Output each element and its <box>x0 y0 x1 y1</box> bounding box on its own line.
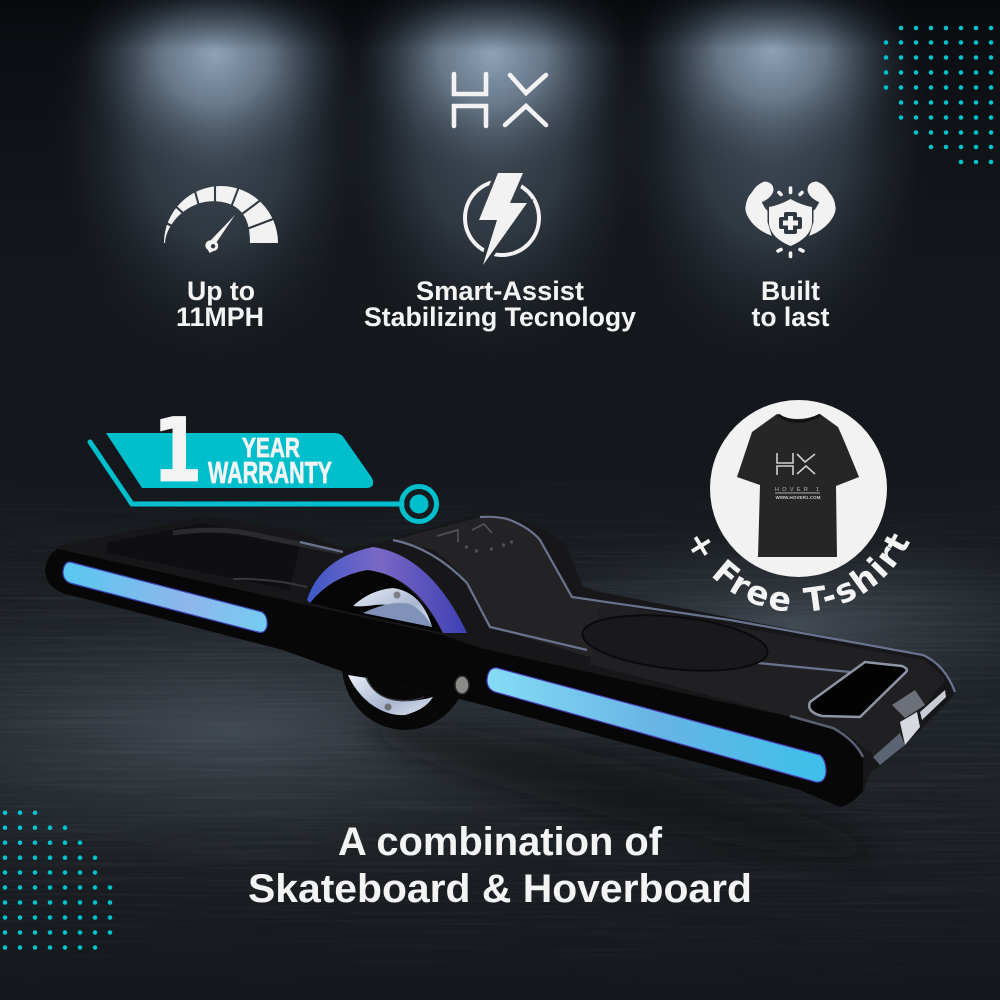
metal end cap <box>873 690 946 765</box>
right deck texture <box>590 603 945 760</box>
label: smart-assist stabilizing tecnology: Smart-Assist <box>416 276 584 306</box>
label: smart-assist stabilizing tecnology <box>364 276 636 332</box>
free t-shirt promo <box>691 400 910 611</box>
feature: durability <box>746 182 835 332</box>
t-shirt: HOVER 1 <box>775 487 819 493</box>
callout line with target <box>90 442 436 522</box>
pivot bolt <box>455 676 469 694</box>
bottom headline <box>248 820 752 911</box>
label: up to 11MPH: Up to <box>187 276 255 306</box>
white circle <box>710 400 887 577</box>
label: up to 11MPH <box>176 276 264 332</box>
icon: flexed arms with shield <box>746 182 835 256</box>
left light bar <box>63 562 267 632</box>
handle slot <box>809 662 907 717</box>
upper wheel hub <box>353 588 432 627</box>
rear deck panels <box>107 523 340 590</box>
year warranty text: WARRANTY <box>208 455 332 490</box>
deck trim lines <box>300 517 955 692</box>
numeral 1: 1 <box>152 399 202 502</box>
dot pattern: bottom left <box>5 813 111 948</box>
board deck <box>47 515 955 807</box>
bottom headline: A combination of <box>338 820 663 864</box>
feature: speed <box>164 186 278 332</box>
right light bar <box>487 668 826 782</box>
wheel arch opening <box>310 570 443 633</box>
icon: lightning bolt in circle <box>465 173 539 265</box>
bottom headline: Skateboard & Hoverboard <box>248 867 752 911</box>
t-shirt: WWW.HOVER1.COM <box>776 495 821 500</box>
label: up to 11MPH: 11MPH <box>176 302 264 332</box>
feature: stabilizing technology <box>364 173 636 332</box>
dot pattern: top right <box>886 28 992 162</box>
label: smart-assist stabilizing tecnology: Stabilizing Tecnology <box>364 302 636 332</box>
hump logo marks <box>437 524 513 551</box>
black side rail <box>45 549 863 807</box>
brand logo <box>454 74 546 126</box>
hoverboard product <box>45 515 955 880</box>
icon: speedometer <box>164 186 278 253</box>
year warranty text: YEAR <box>242 432 300 463</box>
wheel <box>342 600 468 730</box>
label: built to last: to last <box>752 302 830 332</box>
fender light ring <box>307 547 467 633</box>
label: built to last: Built <box>761 276 820 306</box>
hump texture <box>393 517 730 660</box>
badge ribbon <box>106 433 373 488</box>
year warranty text <box>208 432 332 490</box>
label: built to last <box>752 276 830 332</box>
curved label: + Free T-shirt <box>691 533 910 611</box>
shadow under board <box>361 700 879 880</box>
rail upper trim <box>790 716 863 757</box>
t-shirt <box>737 414 859 557</box>
warranty badge <box>90 399 436 522</box>
foot pad <box>580 607 770 679</box>
